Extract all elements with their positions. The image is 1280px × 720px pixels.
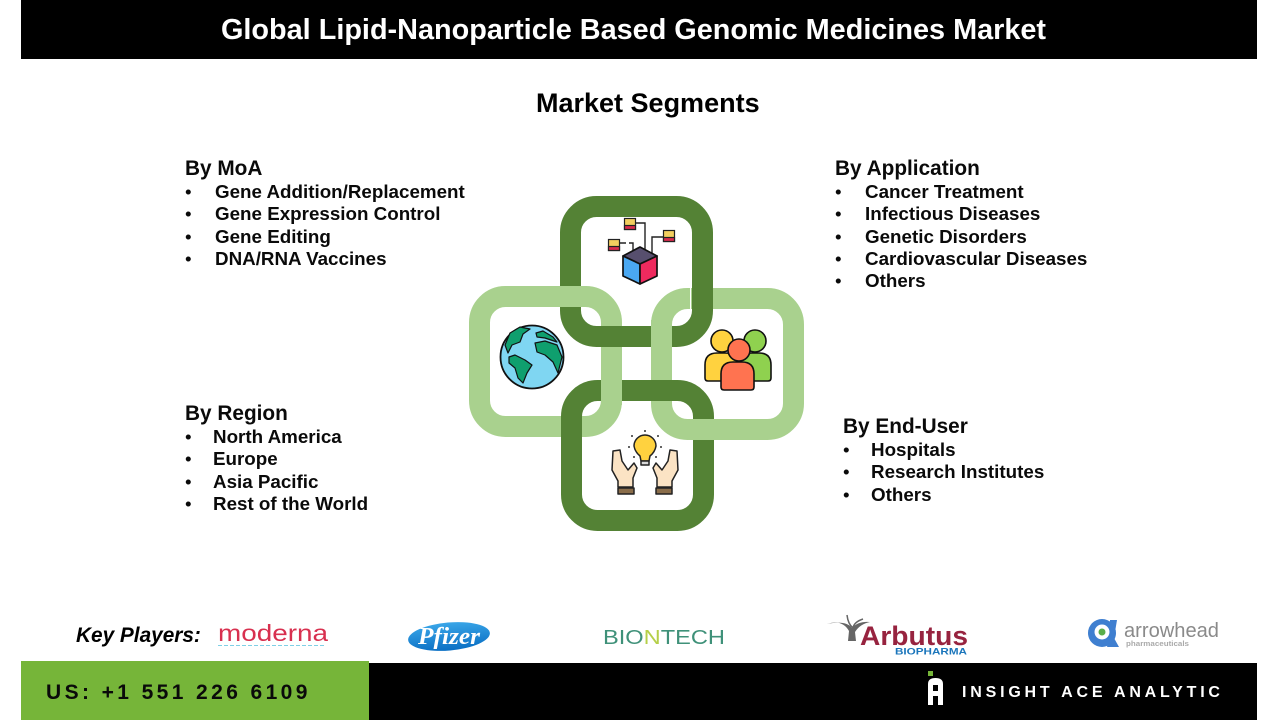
title banner [21, 0, 1257, 59]
ring: bottom dark green [572, 390, 704, 520]
icon: globe [500, 326, 564, 388]
logo: pfizer [408, 622, 490, 651]
text block: by region: By Region [185, 402, 288, 425]
text block: by application: Cardiovascular Diseases [865, 248, 1087, 269]
text block: by region: Asia Pacific [213, 471, 318, 492]
text block: by application: • [835, 181, 842, 202]
logo: arrowhead pharmaceuticals: arrowhead [1124, 620, 1219, 642]
text block: by MoA: • [185, 203, 192, 224]
text block: by region: • [185, 471, 192, 492]
text block: by application: Others [865, 270, 926, 291]
text block: by MoA [185, 157, 465, 269]
text block: by end-user [843, 415, 1044, 505]
logo: arbutus biopharma: Arbutus [860, 621, 968, 651]
text block: by end-user: • [843, 461, 850, 482]
icon: people group [705, 330, 771, 390]
text block: by MoA: • [185, 248, 192, 269]
logo: pfizer: Pfizer [417, 624, 481, 650]
text block: by end-user: Others [871, 484, 932, 505]
text block: by region [185, 402, 368, 514]
phone contact panel [21, 661, 369, 720]
text block: by MoA: • [185, 226, 192, 247]
text block: by region: • [185, 426, 192, 447]
brand logo mark [928, 671, 943, 705]
text block: by application: By Application [835, 157, 980, 180]
text block: by MoA: Gene Addition/Replacement [215, 181, 465, 202]
text block: by application: • [835, 270, 842, 291]
text block: by application: Infectious Diseases [865, 203, 1040, 224]
logo: arbutus biopharma [827, 614, 968, 657]
text block: by end-user: • [843, 439, 850, 460]
text block: by application: • [835, 226, 842, 247]
logo: biontech: BIO NTECH [603, 627, 725, 649]
section heading: market segments: Market Segments [536, 88, 760, 118]
title banner: Global Lipid-Nanoparticle Based Genomic Medicines Market [221, 14, 1046, 46]
logo: arrowhead pharmaceuticals [1088, 619, 1219, 648]
text block: by application [835, 157, 1087, 291]
interlocking chain diagram [469, 196, 804, 531]
thin white gap beside top ring [690, 288, 691, 309]
text block: by MoA: By MoA [185, 157, 262, 180]
footer bar [369, 663, 1257, 720]
text block: by end-user: • [843, 484, 850, 505]
logo: arrowhead pharmaceuticals: pharmaceuticals [1126, 641, 1189, 648]
text block: by application: Genetic Disorders [865, 226, 1027, 247]
ring: right light green [662, 298, 794, 430]
text block: by region: North America [213, 426, 342, 447]
text block: by application: • [835, 203, 842, 224]
text block: by MoA: • [185, 181, 192, 202]
text block: by end-user: Hospitals [871, 439, 956, 460]
icon: data cube [608, 218, 674, 284]
text block: by MoA: Gene Expression Control [215, 203, 440, 224]
text block: by application: Cancer Treatment [865, 181, 1024, 202]
brand name: INSIGHT ACE ANALYTIC [962, 684, 1224, 701]
text block: by MoA: Gene Editing [215, 226, 331, 247]
key players label: Key Players: [76, 624, 201, 647]
text block: by region: Rest of the World [213, 493, 368, 514]
text block: by end-user: By End-User [843, 415, 968, 438]
phone contact panel: US: +1 551 226 6109 [46, 681, 311, 704]
ring: left light green [480, 296, 612, 426]
text block: by end-user: Research Institutes [871, 461, 1044, 482]
text block: by region: • [185, 493, 192, 514]
interlock overlaps in light green [555, 286, 720, 440]
text block: by MoA: DNA/RNA Vaccines [215, 248, 387, 269]
icon: hands with light bulb [612, 430, 678, 494]
ring: top dark green [570, 206, 702, 336]
text block: by region: • [185, 448, 192, 469]
text block: by region: Europe [213, 448, 278, 469]
text block: by application: • [835, 248, 842, 269]
